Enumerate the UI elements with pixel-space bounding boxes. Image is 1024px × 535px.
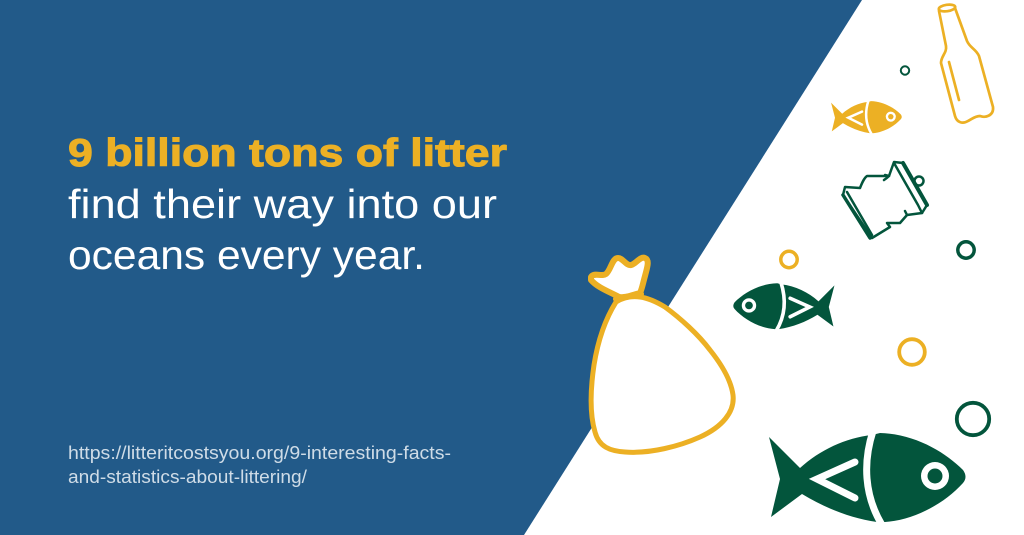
icon: green fish large xyxy=(769,431,966,525)
bag tie xyxy=(616,294,641,299)
icon: yellow fish xyxy=(831,100,902,134)
icon: glass bottle xyxy=(938,4,993,123)
heading: highlighted statistic: 9 billion tons of litter xyxy=(68,132,507,175)
bubble: small green top xyxy=(901,66,909,75)
bag body xyxy=(591,297,733,452)
bubble: green ring xyxy=(958,242,974,258)
icon: green fish medium xyxy=(733,282,834,331)
icon: garbage bag xyxy=(591,258,733,452)
bubble: yellow small ring xyxy=(781,251,797,268)
bubble: yellow large ring xyxy=(899,339,925,365)
text: second line: find their way into our xyxy=(68,181,497,227)
text: third line: oceans every year. xyxy=(68,232,425,278)
icon: crushed can xyxy=(843,162,927,238)
source URL: https://litteritcostsyou.org/9-interesting-facts- xyxy=(68,443,451,463)
source URL: and-statistics-about-littering/ xyxy=(68,467,307,487)
bag knot xyxy=(591,258,648,297)
bubble: green large ring xyxy=(957,403,989,435)
headline text xyxy=(68,132,507,278)
source URL xyxy=(68,443,451,487)
